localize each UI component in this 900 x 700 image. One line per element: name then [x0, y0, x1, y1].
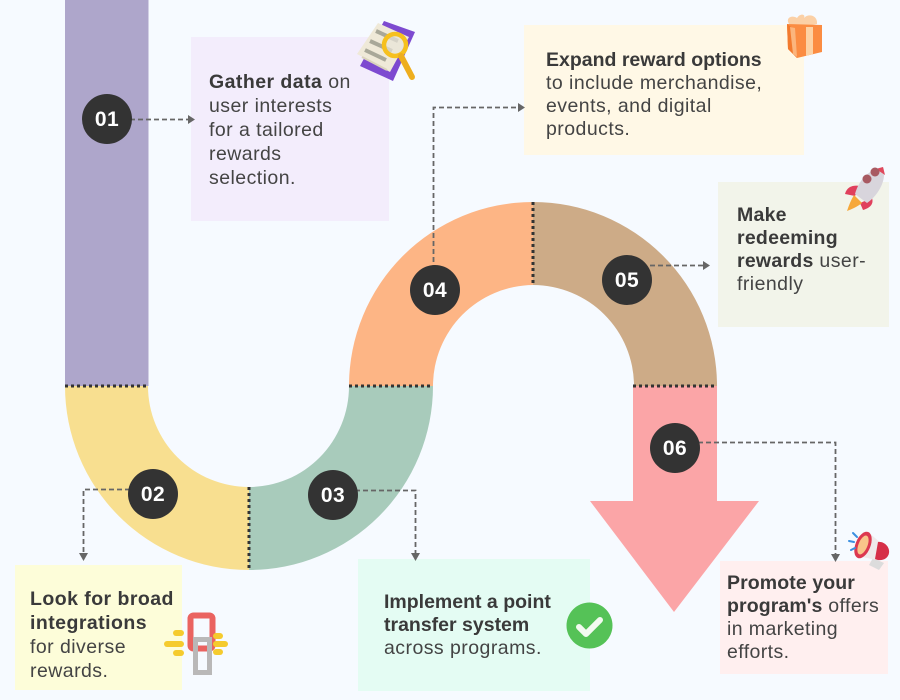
- text: step 1: [209, 71, 351, 189]
- text: step 3: [384, 591, 551, 659]
- panel: step 5: [718, 182, 889, 327]
- text: step 2: for diverse: [30, 636, 126, 658]
- icon: document with magnifier: [357, 21, 415, 81]
- panel: step 6: [720, 561, 888, 674]
- badge: 03: [308, 470, 358, 520]
- icon: rocket: [845, 167, 885, 211]
- text: step 1: selection.: [209, 167, 296, 189]
- badge: 06: [650, 423, 700, 473]
- connector: step 5: [650, 261, 710, 270]
- text: step 3: Implement a point: [384, 591, 551, 613]
- text: step 3: transfer system: [384, 614, 529, 636]
- badge: 06: 06: [663, 437, 687, 460]
- text: step 5: rewards user-: [737, 250, 866, 272]
- text: step 1: user interests: [209, 95, 332, 117]
- segment: tan curve: [533, 202, 717, 386]
- connector: step 6: [698, 442, 840, 562]
- panel: step 2: [15, 565, 182, 690]
- text: step 1: Gather data on: [209, 71, 351, 93]
- connector: step 2: [79, 490, 130, 561]
- badge: 05: [602, 255, 652, 305]
- text: step 4: events, and digital: [546, 95, 712, 117]
- text: step 2: [30, 588, 174, 682]
- segment: yellow curve: [65, 386, 249, 570]
- text: step 5: friendly: [737, 273, 803, 295]
- text: step 6: [727, 572, 879, 663]
- badge: 04: 04: [423, 279, 447, 302]
- badge: 05: 05: [615, 269, 639, 292]
- icon: chain link: [164, 616, 228, 672]
- badge: 03: 03: [321, 484, 345, 507]
- panel: step 3: [358, 559, 590, 691]
- text: step 5: [737, 204, 866, 295]
- badge: 01: 01: [95, 108, 119, 131]
- text: step 4: [546, 49, 762, 140]
- badge: 04: [410, 265, 460, 315]
- badge: 02: 02: [141, 483, 165, 506]
- segment: green curve: [249, 386, 433, 570]
- text: step 5: Make: [737, 204, 787, 226]
- text: step 4: Expand reward options: [546, 49, 762, 71]
- text: step 3: across programs.: [384, 637, 542, 659]
- panel: step 4: [524, 25, 804, 155]
- text: step 2: rewards.: [30, 660, 108, 682]
- text: step 4: products.: [546, 118, 630, 140]
- badge: 01: [82, 94, 132, 144]
- icon: gift box: [787, 15, 822, 58]
- connector: step 3: [355, 490, 420, 561]
- icon: megaphone: [849, 529, 889, 570]
- text: step 4: to include merchandise,: [546, 72, 762, 94]
- text: step 6: Promote your: [727, 572, 855, 594]
- text: step 6: program's offers: [727, 595, 879, 617]
- segment: orange curve: [349, 202, 533, 386]
- text: step 1: for a tailored: [209, 119, 324, 141]
- icon: green check: [566, 602, 612, 648]
- segment: pink arrow: [590, 386, 759, 612]
- connector: step 1: [130, 115, 195, 124]
- connector: step 4: [434, 103, 525, 270]
- segment: purple column: [65, 0, 148, 386]
- text: step 5: redeeming: [737, 227, 838, 249]
- text: step 1: rewards: [209, 143, 282, 165]
- text: step 6: in marketing: [727, 618, 838, 640]
- text: step 6: efforts.: [727, 641, 789, 663]
- text: step 2: integrations: [30, 612, 147, 634]
- badge: 02: [128, 469, 178, 519]
- text: step 2: Look for broad: [30, 588, 174, 610]
- panel: step 1: [191, 37, 389, 221]
